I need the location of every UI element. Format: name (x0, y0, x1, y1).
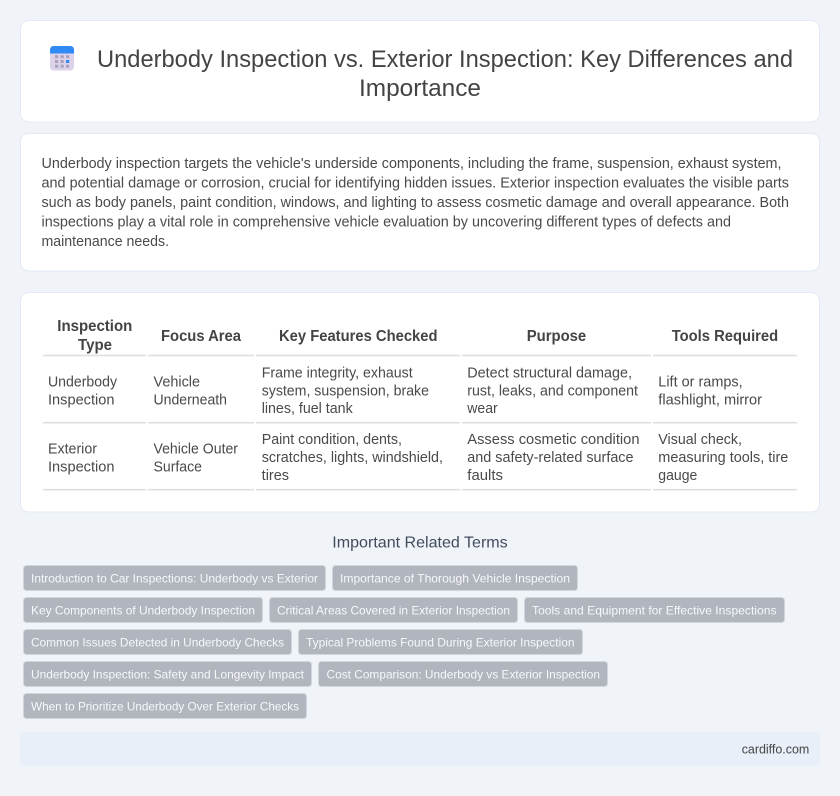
table row: underbody inspection: lines, fuel tank (262, 401, 353, 417)
table row: underbody inspection: Frame integrity, exhaust (262, 365, 413, 381)
footer (20, 732, 820, 766)
panel: related term tags (24, 566, 784, 718)
table row: exterior inspection: Exterior (48, 441, 97, 457)
tag row 3 (24, 630, 582, 654)
text block: introduction paragraph (42, 156, 789, 250)
table row: exterior inspection: faults (467, 468, 503, 484)
table header row: Purpose (527, 328, 586, 345)
tag row 3: Common Issues Detected in Underbody Checks (31, 635, 284, 649)
tag row 1 (24, 566, 578, 590)
table row: exterior inspection: and safety-related surface (467, 450, 634, 466)
table row: underbody inspection: Vehicle (154, 374, 200, 390)
table row: exterior inspection: Visual check, (658, 432, 742, 448)
footer source label: cardiffo.com (742, 741, 809, 756)
text block: introduction paragraph: maintenance needs. (42, 234, 169, 250)
text block: introduction paragraph: inspections play a vital role in comprehensive vehicle evaluation by uncovering different types of defects and (42, 214, 731, 230)
tag row 2 (24, 598, 784, 622)
table row: underbody inspection: system, suspension, brake (262, 383, 429, 399)
title: Underbody Inspection vs. Exterior Inspection: Key Differences and (97, 46, 793, 73)
table header row: Key Features Checked (279, 328, 438, 345)
table header row: Inspection (57, 318, 132, 335)
heading: important related terms: Important Related Terms (332, 534, 508, 552)
table header row (57, 318, 778, 354)
table row: underbody inspection: Detect structural damage, (467, 365, 632, 381)
table row: underbody inspection: Underneath (154, 392, 227, 408)
tag row 4: Underbody Inspection: Safety and Longevity Impact (31, 667, 305, 681)
table row: exterior inspection: tires (262, 468, 289, 484)
table header row: Tools Required (672, 328, 778, 345)
tag row 4 (24, 662, 608, 686)
table row: exterior inspection (48, 432, 788, 484)
table row: underbody inspection: Underbody (48, 374, 118, 390)
table row: exterior inspection: gauge (658, 468, 697, 484)
table row: exterior inspection: Surface (154, 459, 202, 475)
table row: underbody inspection: Lift or ramps, (658, 374, 743, 390)
tag row 2: Tools and Equipment for Effective Inspections (532, 603, 776, 617)
tag row 5 (24, 694, 306, 718)
table row: exterior inspection: Vehicle Outer (154, 441, 238, 457)
tag row 4: Cost Comparison: Underbody vs Exterior Inspection (326, 667, 600, 681)
tag row 2: Critical Areas Covered in Exterior Inspection (277, 603, 510, 617)
tag row 2: Key Components of Underbody Inspection (31, 603, 255, 617)
table row: exterior inspection: Assess cosmetic condition (467, 432, 640, 448)
table row: underbody inspection: wear (466, 401, 498, 417)
table header row: Type (78, 337, 112, 354)
table header row: Focus Area (161, 328, 241, 345)
title: Importance (359, 75, 481, 102)
text block: introduction paragraph: such as body panels, paint condition, windows, and lighting to assess cosmetic damage and overall appearance. Both (42, 195, 789, 211)
panel: comparison table (20, 292, 820, 512)
table row: exterior inspection: scratches, lights, windshield, (262, 450, 443, 466)
table row: exterior inspection: Paint condition, dents, (262, 432, 402, 448)
table row: underbody inspection: flashlight, mirror (658, 392, 762, 408)
text block: introduction paragraph: and potential damage or corrosion, crucial for identifying hidden issues. Exterior inspection evaluates the visible parts (42, 176, 789, 192)
table row: underbody inspection: rust, leaks, and component (467, 383, 638, 399)
tag row 5: When to Prioritize Underbody Over Exterior Checks (31, 699, 299, 713)
table row: underbody inspection: Inspection (48, 392, 115, 408)
icon: calendar (50, 46, 74, 70)
table row: underbody inspection (48, 365, 762, 417)
tag row 3: Typical Problems Found During Exterior Inspection (306, 635, 574, 649)
panel: title card (20, 20, 820, 122)
table row: exterior inspection: measuring tools, tire (658, 450, 788, 466)
panel: introduction (20, 134, 820, 271)
text block: introduction paragraph: Underbody inspection targets the vehicle's underside components, including the frame, suspension, exhaust system, (42, 156, 782, 172)
tag row 1: Introduction to Car Inspections: Underbody vs Exterior (31, 571, 318, 585)
title (97, 46, 793, 102)
table row: exterior inspection: Inspection (48, 459, 115, 475)
tag row 1: Importance of Thorough Vehicle Inspection (340, 571, 570, 585)
